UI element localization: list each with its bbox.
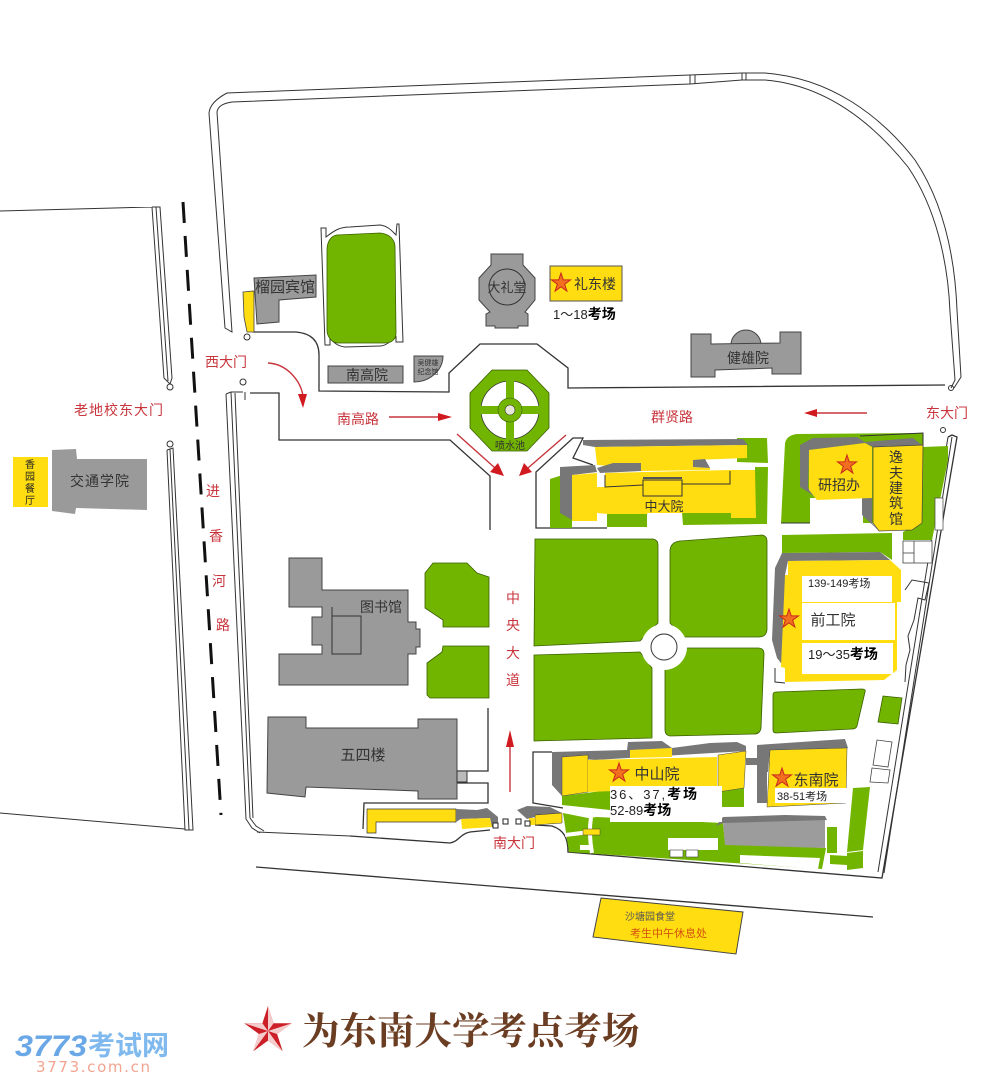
building: 图书馆: 图书馆	[360, 599, 402, 615]
east side minor structures	[870, 541, 932, 783]
legend title: 为东南大学考点考场	[302, 1011, 640, 1053]
road labels and arrows: 路	[216, 617, 230, 633]
building: 图书馆	[279, 558, 420, 685]
watermark logo: 3773.com.cn	[36, 1058, 150, 1076]
building: 中大院: 中大院	[644, 499, 684, 514]
building: 中山院	[533, 741, 746, 822]
road labels and arrows: 香	[209, 528, 223, 544]
watermark logo: 考试网	[88, 1031, 169, 1061]
south gate buildings	[367, 806, 562, 833]
bottom service area	[563, 787, 870, 870]
callout: 沙塘园食堂: 沙塘园食堂	[625, 910, 675, 923]
building: 交通学院	[52, 449, 147, 514]
road labels and arrows: 河	[212, 573, 226, 589]
road labels and arrows: 西大门	[205, 354, 247, 370]
road labels and arrows: 大	[506, 645, 520, 661]
building: 礼东楼	[550, 266, 622, 301]
legend star icon	[244, 1006, 292, 1051]
building: 交通学院: 交通学院	[70, 473, 130, 489]
callout: 沙塘园食堂	[593, 898, 743, 954]
building: 中山院: 36、37,考场	[610, 786, 697, 802]
building: 健雄院: 健雄院	[727, 350, 769, 366]
lawns by library	[425, 563, 489, 698]
building: memorial hall	[414, 356, 443, 382]
building: 香园餐厅: 厅	[25, 496, 35, 507]
building: 榴园宾馆	[243, 275, 316, 332]
road labels and arrows: 东大门	[926, 405, 968, 421]
building: 前工院: 139-149考场	[808, 576, 870, 590]
building: 健雄院	[691, 330, 801, 377]
road labels and arrows: 进	[206, 483, 220, 499]
building: 南高院: 南高院	[346, 367, 388, 383]
fountain	[470, 370, 549, 452]
building: 东南院: 东南院	[793, 771, 839, 789]
building: 研招办 and 逸夫建筑馆: 筑	[889, 495, 903, 511]
old campus walls	[0, 207, 193, 830]
watermark logo	[15, 1030, 169, 1076]
building: 研招办 and 逸夫建筑馆: 研招办	[818, 477, 860, 493]
sports track	[321, 224, 403, 347]
road labels and arrows: 中	[506, 590, 520, 606]
road labels and arrows: 老地校东大门	[74, 402, 164, 418]
building: 前工院: 19～35考场	[808, 646, 878, 662]
fountain: 喷水池	[495, 439, 525, 452]
callout: 沙塘园食堂: 考生中午休息处	[630, 926, 707, 940]
building: 大礼堂	[479, 254, 535, 328]
building: 东南院: 38-51考场	[777, 789, 827, 803]
building: 大礼堂: 大礼堂	[487, 280, 527, 295]
building: 榴园宾馆: 榴园宾馆	[255, 279, 315, 296]
road labels and arrows	[74, 354, 968, 851]
road labels and arrows: 南大门	[493, 835, 535, 851]
lawn south of 前工院	[773, 689, 865, 733]
building: 香园餐厅: 餐	[25, 482, 35, 495]
building: 香园餐厅: 园	[25, 471, 35, 483]
building: memorial hall: 纪念馆	[418, 367, 438, 376]
road labels and arrows: 南高路	[337, 411, 379, 427]
building: 研招办 and 逸夫建筑馆: 馆	[889, 511, 903, 527]
building: 研招办 and 逸夫建筑馆	[781, 433, 948, 540]
building: 前工院: 前工院	[810, 611, 856, 629]
building: 中大院	[536, 438, 768, 528]
building: 五四楼	[267, 717, 467, 799]
building: 香园餐厅	[13, 457, 48, 507]
building: 南高院	[328, 366, 403, 383]
road labels and arrows: 群贤路	[651, 409, 693, 425]
road labels and arrows: 道	[506, 672, 520, 688]
building: 研招办 and 逸夫建筑馆: 逸	[889, 449, 903, 465]
west wall south section	[226, 334, 264, 833]
watermark logo: 3773	[15, 1030, 87, 1063]
building: memorial hall: 吴健雄	[418, 358, 438, 367]
central lawns	[534, 535, 767, 741]
building: 研招办 and 逸夫建筑馆: 夫	[889, 465, 903, 481]
campus north wall	[209, 73, 961, 390]
building: 中山院: 52-89考场	[610, 802, 671, 818]
road outlines	[250, 332, 957, 917]
building: 东南院	[757, 739, 848, 807]
building: 中山院: 中山院	[634, 765, 680, 783]
label: 1~18 exam rooms: 1～18考场	[553, 306, 616, 322]
building: 五四楼: 五四楼	[340, 747, 386, 764]
connector between 中山院 and 东南院	[746, 758, 768, 803]
building: 香园餐厅: 香	[25, 459, 35, 471]
road labels and arrows: 央	[506, 617, 520, 633]
dashed road line	[183, 202, 221, 815]
building: 前工院	[772, 533, 901, 683]
building: 研招办 and 逸夫建筑馆: 建	[889, 480, 903, 496]
building: 礼东楼: 礼东楼	[574, 276, 616, 292]
